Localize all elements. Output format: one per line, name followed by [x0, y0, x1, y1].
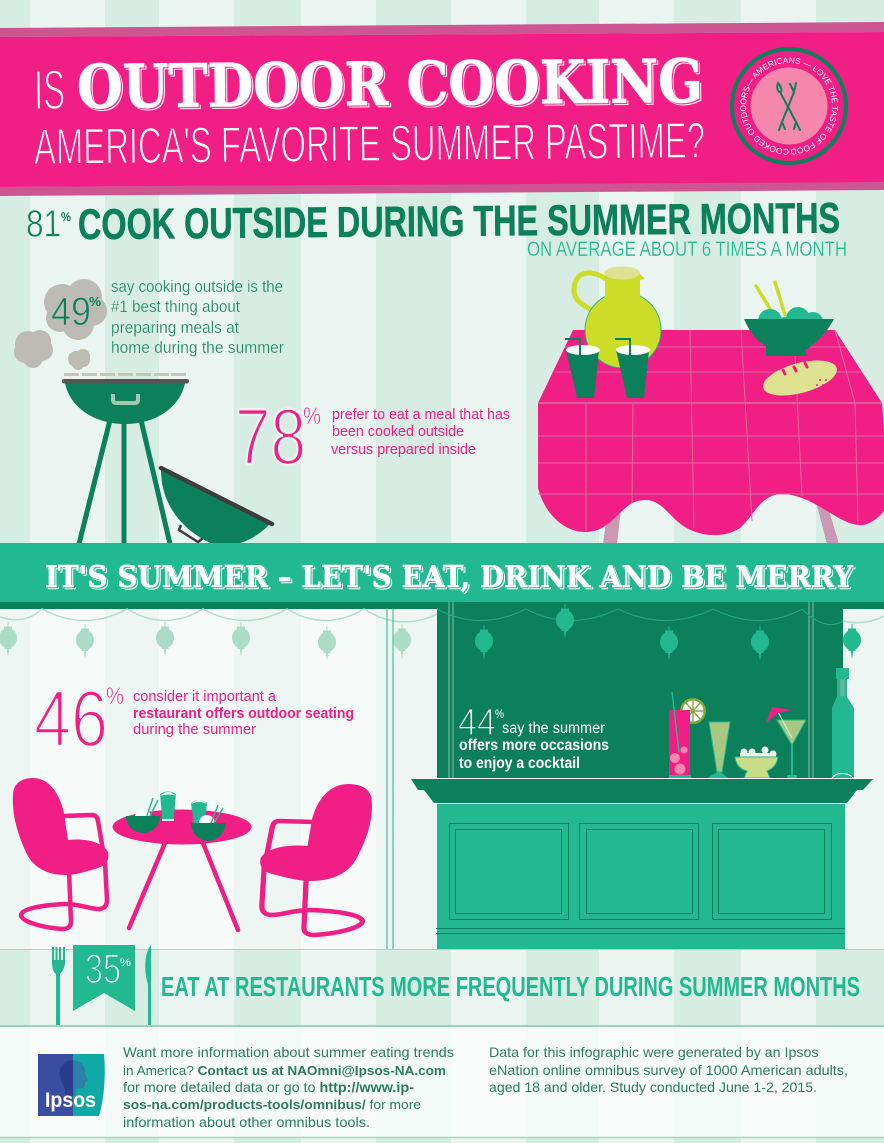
- text: prefer to eat a meal: versus prepared inside: [331, 441, 476, 458]
- text: prefer to eat a meal: prefer to eat a meal that has: [332, 406, 510, 423]
- text: data source: eNation online omnibus survey of 1000 American adults,: [489, 1062, 848, 1078]
- stat: 78%: %: [303, 403, 321, 430]
- cups: [565, 339, 650, 398]
- text: say cooking outside: #1 best thing about: [111, 297, 240, 316]
- tablecloth: [538, 330, 884, 535]
- text: more information: Want more information about summer eating trends: [123, 1044, 454, 1060]
- right glass: [191, 800, 207, 825]
- left bowl: [126, 798, 160, 833]
- stat: 46%: %: [106, 683, 124, 710]
- text: data source: aged 18 and older. Study conducted June 1-2, 2015.: [489, 1079, 817, 1095]
- text: prefer to eat a meal: [331, 406, 510, 458]
- text: more information: sos-na.com/products-tools/omnibus/ for more: [123, 1097, 421, 1112]
- heading: 81% cook outside: 81: [26, 203, 61, 246]
- right bowl: [191, 805, 226, 841]
- ribbon: 35%: 35: [85, 945, 121, 992]
- logo: Ipsos: Ipsos: [45, 1089, 96, 1112]
- text: consider it important: consider it important a: [133, 688, 277, 705]
- text: say the summer: to enjoy a cocktail: [459, 755, 580, 772]
- icon: nut bowl: [735, 746, 778, 778]
- icon: grill: [62, 373, 189, 544]
- badge: americans love the taste of food cooked outdoors: COOKED OUTDOORS— AMERICANS — LOVE THE TASTE OF FOOD: [740, 57, 838, 155]
- text: say the summer: [459, 720, 609, 772]
- icon: grill lid: [161, 468, 272, 545]
- window frame lines: [387, 609, 393, 949]
- shelf: [411, 778, 873, 804]
- icon: crossed forks: [777, 83, 800, 130]
- title line 1: OUTDOOR COOKING: [77, 47, 703, 123]
- stat: 78%: 78: [235, 392, 306, 481]
- text: say cooking outside: home during the summer: [111, 338, 284, 357]
- logo: Ipsos: [38, 1054, 105, 1116]
- icon: fork: [52, 947, 65, 1025]
- text: prefer to eat a meal: been cooked outside: [332, 423, 464, 440]
- left glass: [160, 792, 176, 821]
- text: say cooking outside: [111, 277, 284, 357]
- text: more information: information about other omnibus tools.: [123, 1114, 370, 1130]
- header banner: [0, 22, 884, 196]
- text: more information: in America? Contact us at NAOmni@Ipsos-NA.com: [123, 1063, 446, 1078]
- text: say cooking outside: preparing meals at: [111, 318, 239, 337]
- illustration: right chair: [260, 784, 372, 935]
- stat: 49%: %: [89, 294, 101, 309]
- text: more information: [123, 1044, 454, 1130]
- icon: smoke clouds: [14, 279, 107, 370]
- text: consider it important: [133, 688, 354, 738]
- icon: tall cocktail: [669, 692, 706, 778]
- jug: [574, 266, 661, 368]
- icon: flute: [707, 722, 730, 778]
- icon: martini with umbrella: [766, 707, 806, 778]
- table legs: [603, 490, 839, 544]
- text: more information: for more detailed data or go to http://www.ip-: [123, 1079, 414, 1095]
- panel: bar: [411, 602, 884, 950]
- stat: 44%: %: [495, 707, 504, 721]
- illustration: picnic table: [538, 266, 884, 544]
- illustration: cafe table: [112, 792, 252, 930]
- text: consider it important: during the summer: [133, 721, 256, 738]
- illustration: left chair: [13, 778, 108, 929]
- text: data source: [489, 1044, 848, 1095]
- salad bowl: [744, 282, 834, 356]
- stat: 49%: 49: [51, 290, 91, 334]
- text: data source: Data for this infographic were generated by an Ipsos: [489, 1044, 818, 1060]
- bar cabinet: [436, 804, 845, 950]
- text: say cooking outside: say cooking outside is the: [111, 277, 283, 296]
- ribbon: 35%: [73, 945, 135, 1011]
- title line 1: IS: [34, 58, 65, 121]
- string of lanterns: left: [0, 609, 437, 661]
- icon: bottle: [832, 668, 854, 778]
- lanterns: [475, 604, 861, 661]
- heading: 81% cook outside: %: [61, 209, 71, 224]
- tablecloth grid: [538, 330, 884, 531]
- stat: 44%: 44: [458, 702, 496, 744]
- ribbon: 35%: %: [120, 957, 131, 969]
- text: say the summer: offers more occasions: [459, 737, 609, 754]
- banner: 35% eat at restaurants: [0, 945, 884, 1138]
- icon: knife: [145, 945, 151, 1025]
- bread: [759, 354, 841, 402]
- text: consider it important: restaurant offers outdoor seating: [133, 705, 354, 722]
- stat: 46%: 46: [34, 674, 108, 763]
- section band: it's summer: [0, 543, 884, 609]
- text: say the summer: say the summer: [502, 720, 605, 737]
